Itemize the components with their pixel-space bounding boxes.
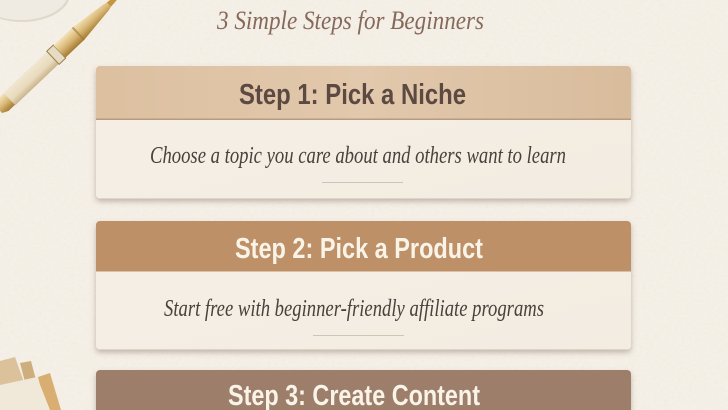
panel: step 2 xyxy=(96,221,631,350)
panel: step 3 xyxy=(96,370,631,410)
panel: step 1 xyxy=(96,66,631,198)
step 1 heading: Step 1: Pick a Niche xyxy=(239,79,466,111)
step 1 header band xyxy=(96,66,631,119)
step 2 heading: Step 2: Pick a Product xyxy=(235,233,483,265)
icon: saucer xyxy=(0,0,70,22)
icon: gold pen xyxy=(0,0,122,116)
icon: folders and papers xyxy=(0,357,61,410)
step 2 header band xyxy=(96,221,631,272)
title: 3 Simple Steps for Beginners xyxy=(216,6,484,35)
step 1 description: Choose a topic you care about and others want to learn xyxy=(150,143,566,169)
step 2 description: Start free with beginner-friendly affiliate programs xyxy=(164,296,544,322)
